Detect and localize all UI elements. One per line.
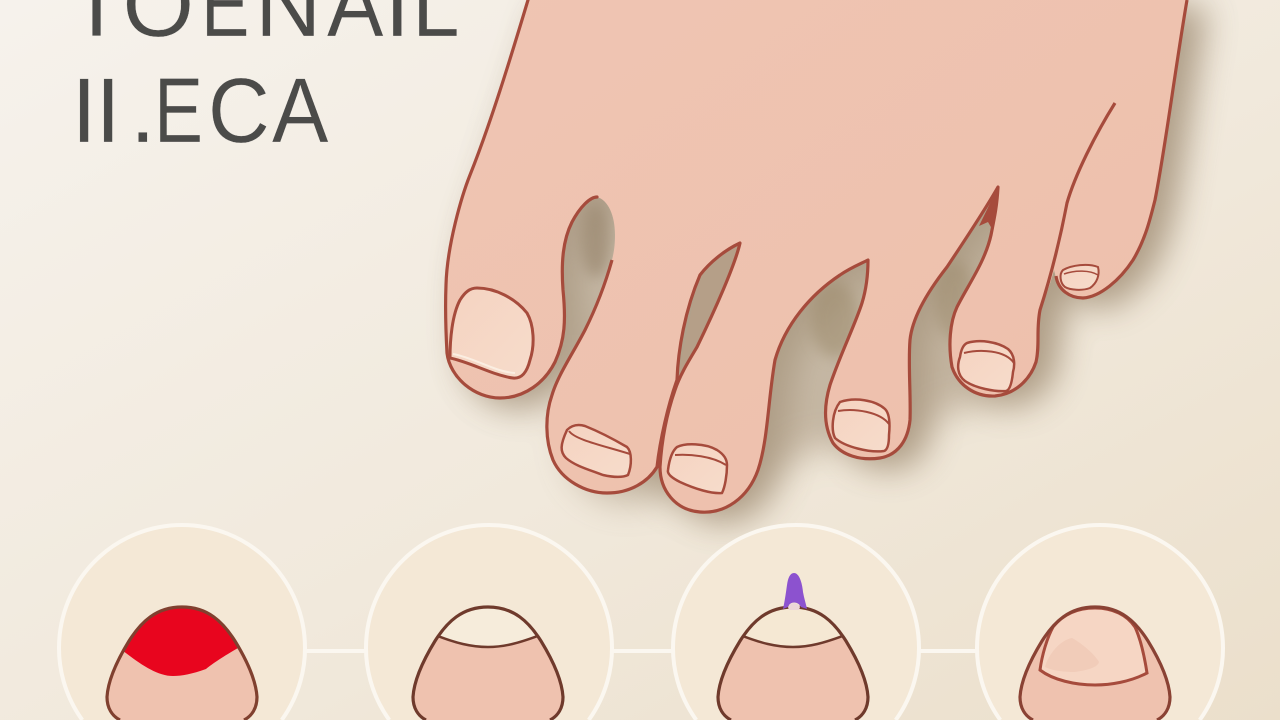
nail <box>1040 608 1147 685</box>
title: I <box>95 60 121 162</box>
circle <box>673 525 919 720</box>
tool tip <box>788 603 800 610</box>
circle <box>59 525 305 720</box>
little toenail <box>1061 265 1099 290</box>
toe outline <box>413 607 563 720</box>
stage 3: nail with purple tool <box>673 525 919 720</box>
circle <box>977 525 1223 720</box>
purple tool <box>783 573 807 609</box>
nail edge <box>744 636 842 648</box>
second toenail <box>562 425 631 477</box>
stage 1: red infected nail <box>59 525 305 720</box>
toe outline <box>107 607 257 720</box>
title: C <box>208 60 269 162</box>
foot outline: little toe <box>1056 0 1187 298</box>
foot illustration <box>446 0 1207 522</box>
title: E <box>154 60 203 162</box>
toe outline <box>718 607 868 720</box>
soft shadow filling the toe gaps <box>462 6 1203 518</box>
nail edge <box>439 636 537 648</box>
title: I <box>71 60 97 162</box>
title <box>68 0 460 162</box>
foot outline: middle toes <box>547 103 1115 512</box>
red nail <box>124 608 238 676</box>
foot outline: big toe <box>446 0 597 398</box>
stage 4: healthy nail <box>977 525 1223 720</box>
toe <box>1020 607 1170 720</box>
toe outline <box>1020 607 1170 720</box>
third toenail <box>668 444 727 493</box>
circle <box>366 525 612 720</box>
title: A <box>272 60 328 162</box>
nail highlight <box>1045 638 1099 672</box>
toe <box>718 607 868 720</box>
gap shadow: fourth toe gap <box>935 260 975 340</box>
stage 2: plain nail <box>366 525 612 720</box>
gap shadow: first toe gap <box>581 202 611 278</box>
foot skin <box>446 0 1187 512</box>
connector lines between circles <box>306 649 977 653</box>
gap shadow: third toe gap <box>811 282 859 358</box>
big toenail <box>450 288 533 378</box>
web wedge between fourth and fifth toes <box>979 187 998 229</box>
nail <box>440 608 536 646</box>
nail <box>746 608 840 646</box>
gap shadow: second toe gap <box>676 243 740 385</box>
fourth toenail <box>833 400 890 451</box>
toe <box>107 607 257 720</box>
foot cast shadow <box>466 10 1207 522</box>
toe <box>413 607 563 720</box>
title: . <box>130 60 156 162</box>
fifth toenail <box>958 341 1014 391</box>
